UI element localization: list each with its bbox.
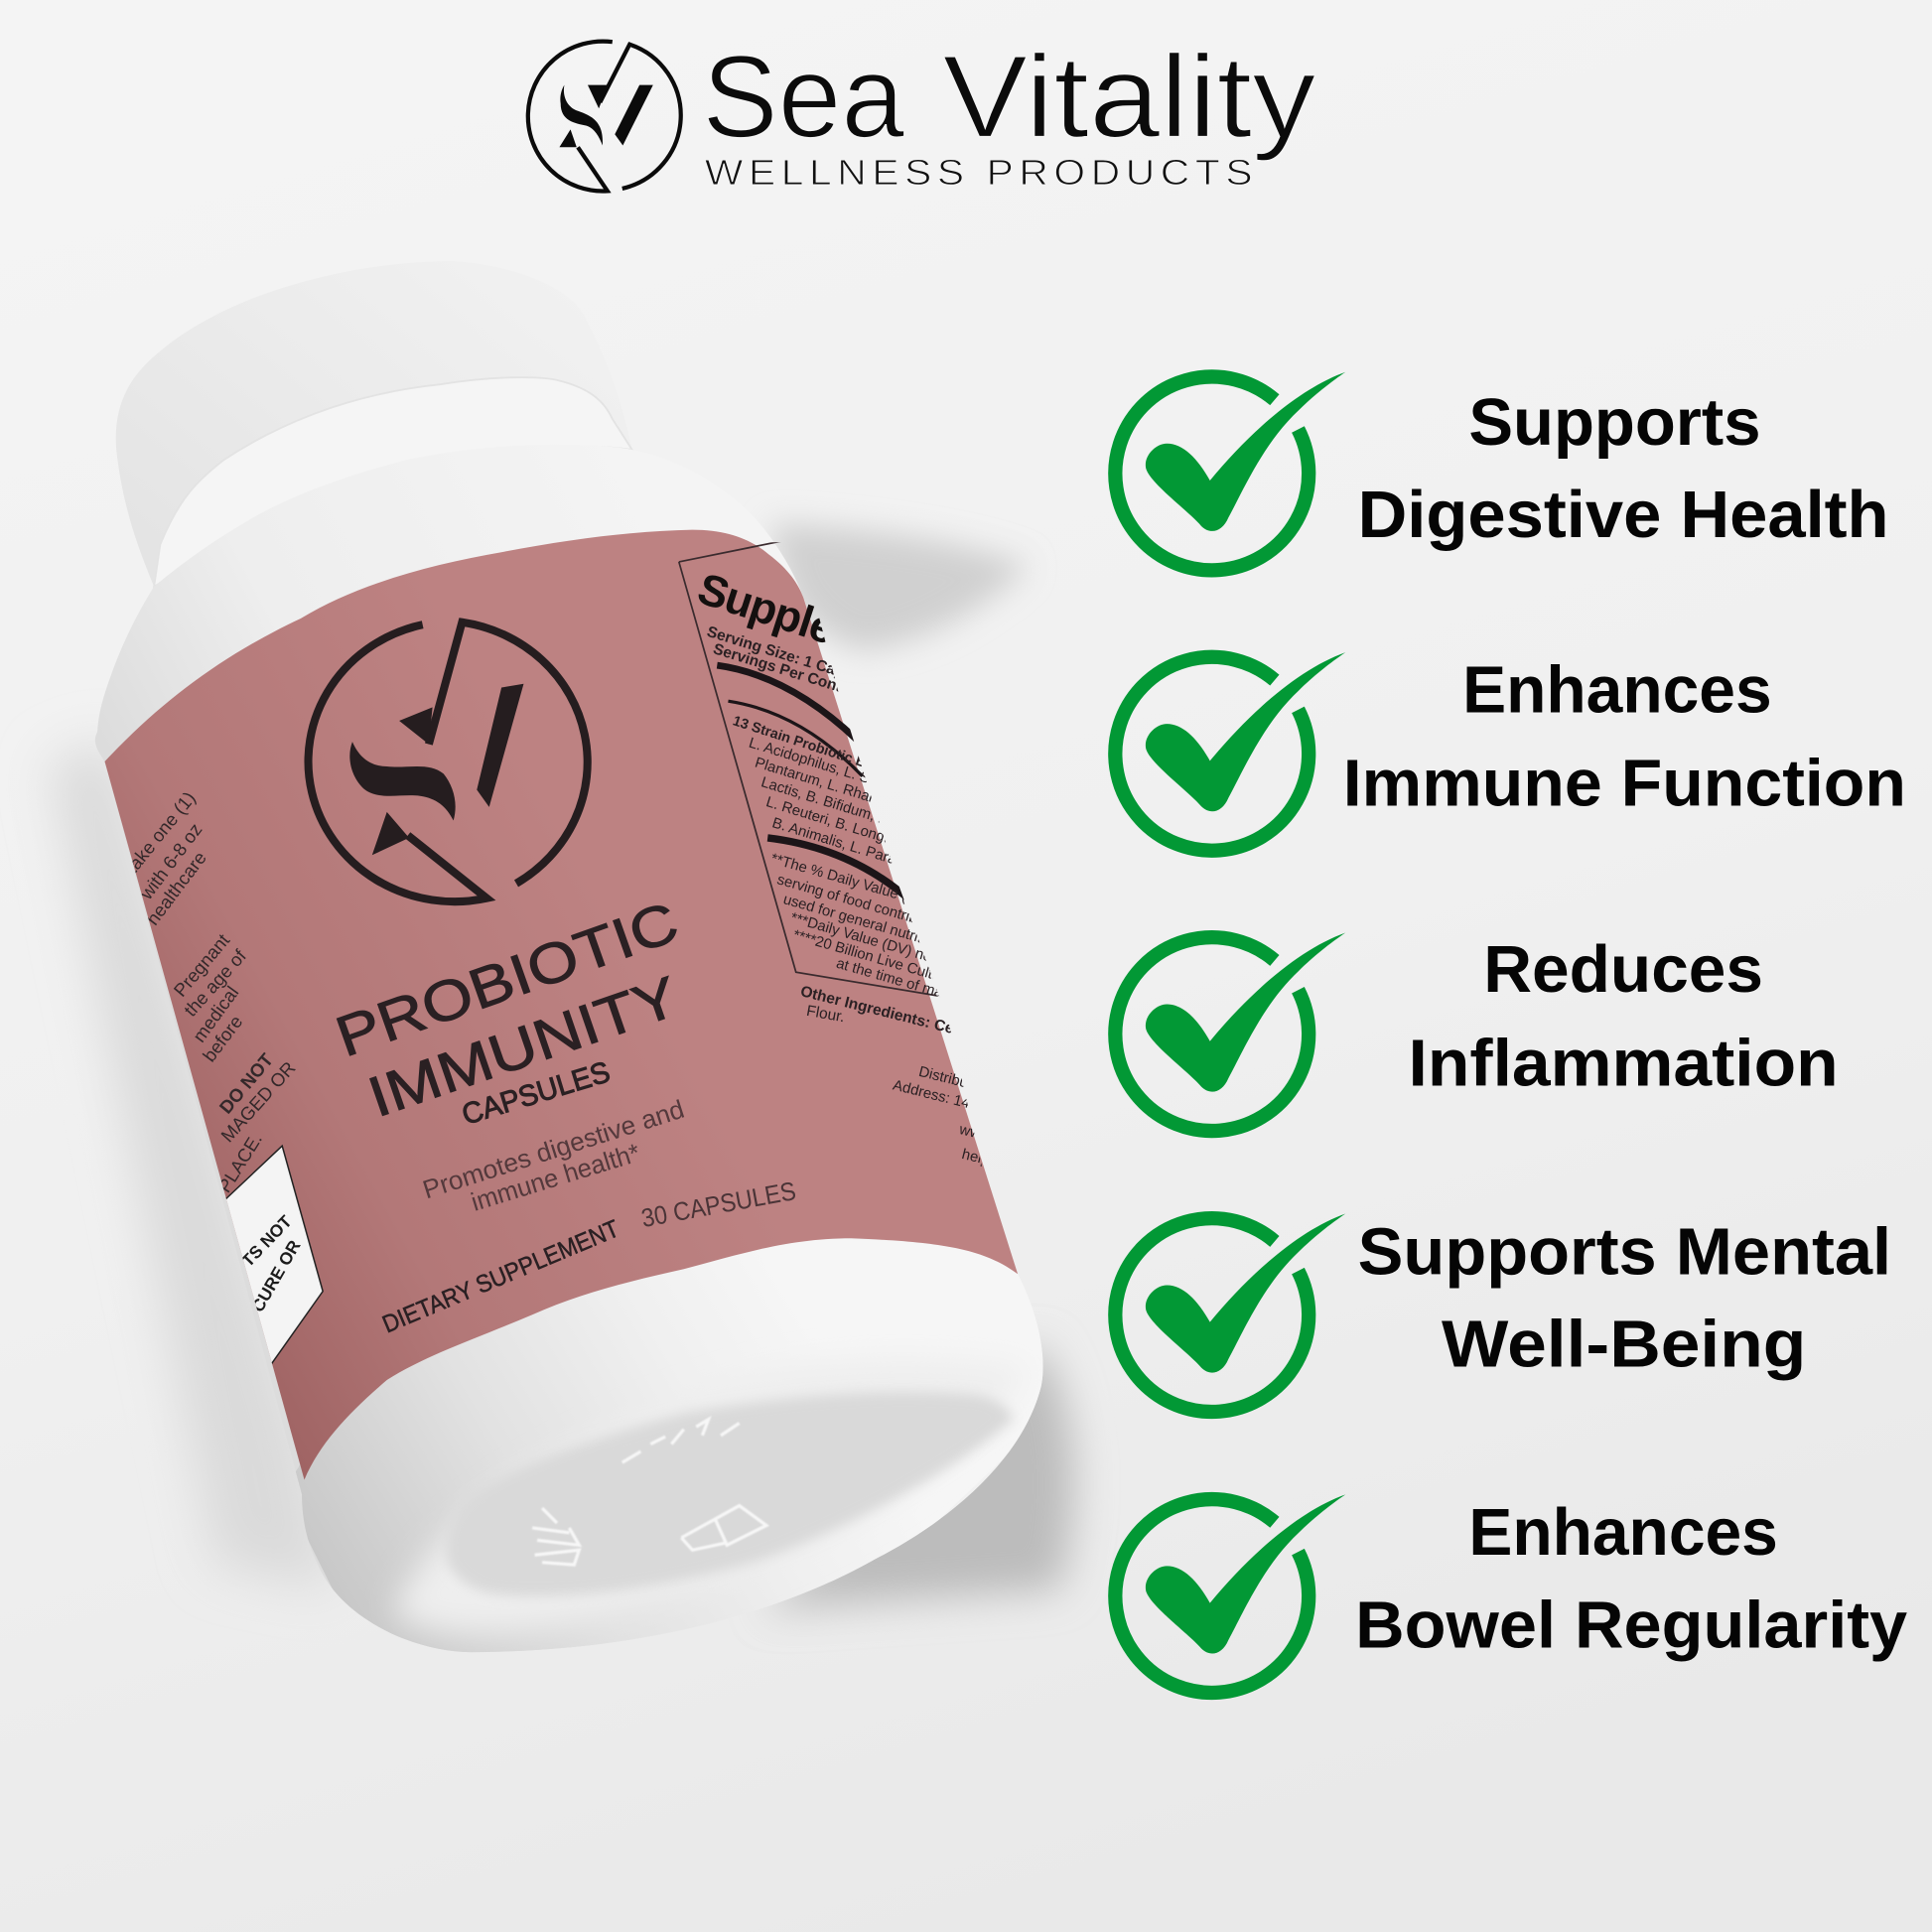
supplement facts panel: L. Acidophilus, L. Salivarius	[747, 736, 923, 803]
left side directions text: PLACE.	[213, 1129, 266, 1196]
white warning box: CURE OR	[247, 1236, 305, 1315]
supplement facts panel: Serving Size: 1 Capsule	[705, 623, 877, 690]
bottle cap	[116, 261, 632, 587]
left side directions text: before	[199, 1012, 246, 1065]
supplement facts panel: used for general nutrition	[781, 892, 943, 952]
supplement facts panel: Lactis, B. Bifidum, L. Casei	[759, 774, 932, 842]
benefit text: Enhances	[1468, 1495, 1778, 1570]
left side directions text: MAGED OR	[216, 1057, 300, 1146]
product bottle	[95, 261, 1059, 1663]
base recess	[446, 1392, 1014, 1596]
benefit text: Supports Mental	[1358, 1214, 1891, 1289]
benefit text	[1409, 932, 1839, 1100]
capsule count: 30 CAPSULES	[639, 1175, 798, 1233]
supplement facts panel: help@	[960, 1147, 1006, 1173]
brand name: Vitality	[942, 31, 1316, 162]
supplement facts panel: Supplement	[692, 565, 938, 686]
supplement facts panel: Other Ingredients: Cellulose	[798, 983, 1003, 1049]
left side directions text	[133, 792, 296, 1193]
benefit text: Enhances	[1462, 652, 1772, 727]
label logo	[309, 622, 588, 901]
cap collar	[154, 377, 632, 587]
left side directions text: Pregnant	[170, 929, 234, 1001]
supplement facts panel: Flour.	[805, 1003, 846, 1026]
benefit text: Bowel Regularity	[1355, 1587, 1907, 1662]
white warning box	[226, 1144, 324, 1364]
benefit 5	[1115, 1494, 1907, 1693]
product name	[328, 891, 686, 1132]
left side directions text: healthcare	[142, 848, 210, 929]
check icon	[1115, 932, 1345, 1131]
bottle cast shadows	[50, 523, 1074, 1609]
left side directions text: with 6-8 oz	[135, 819, 207, 903]
supplement facts panel: ****20 Billion Live Cultures	[791, 927, 962, 991]
product description: Promotes digestive and	[419, 1094, 688, 1204]
benefit text: Well-Being	[1442, 1307, 1806, 1381]
benefit 1	[1115, 372, 1889, 570]
base rim highlight	[392, 1536, 625, 1640]
supplement facts panel: **The % Daily Value (DV)	[769, 851, 933, 912]
brand name: Sea	[702, 31, 904, 162]
brand name	[702, 31, 1316, 162]
check icon	[1115, 652, 1345, 851]
dietary supplement line: DIETARY SUPPLEMENT	[379, 1215, 623, 1338]
supplement facts panel: 13 Strain Probiotic Blend	[731, 713, 896, 780]
brand tagline: WELLNESS PRODUCTS	[705, 152, 1258, 193]
benefit text: Reduces	[1483, 932, 1763, 1007]
benefit text: Supports	[1468, 385, 1760, 460]
benefit text	[1355, 1495, 1907, 1662]
supplement facts panel: B. Animalis, L. Paracasei	[770, 815, 931, 879]
check icon	[1115, 1213, 1345, 1412]
product description: immune health*	[468, 1137, 643, 1217]
benefit text: Inflammation	[1409, 1026, 1839, 1100]
check icon	[1115, 372, 1345, 570]
supplement facts panel: Plantarum, L. Rhamnosus	[753, 755, 921, 820]
left side directions text: medical	[189, 982, 242, 1046]
benefit 2	[1115, 652, 1906, 851]
logo mark	[528, 42, 681, 192]
benefit text	[1358, 1214, 1891, 1381]
white warning box: TS NOT	[237, 1211, 296, 1271]
benefit 4	[1115, 1213, 1891, 1412]
product name: CAPSULES	[459, 1055, 614, 1132]
brand logo	[528, 31, 1316, 193]
benefit 3	[1115, 932, 1839, 1131]
supplement facts panel: Servings Per Container: 30	[711, 640, 904, 715]
supplement facts panel: at the time of manufacture	[834, 956, 1004, 1019]
left side directions text: DO NOT	[215, 1048, 278, 1118]
supplement facts panel: serving of food contributes	[775, 872, 946, 935]
embossed marks	[532, 1420, 766, 1565]
supplement facts panel: ***Daily Value (DV) not	[788, 910, 938, 967]
bottle base	[296, 1372, 1042, 1652]
left side directions text: take one (1)	[121, 787, 200, 878]
supplement facts panel	[678, 542, 982, 1167]
pink label	[104, 530, 1018, 1480]
product name: IMMUNITY	[360, 965, 686, 1130]
benefit text: Immune Function	[1343, 747, 1906, 821]
check icon	[1115, 1494, 1345, 1693]
supplement facts panel: L. Reuteri, B. Longum	[764, 794, 906, 852]
left side directions text: the age of	[180, 945, 251, 1021]
benefit text	[1343, 652, 1906, 821]
supplement facts panel: Distributed by	[917, 1064, 1009, 1101]
benefit text: Digestive Health	[1358, 478, 1889, 552]
supplement facts panel: Address: 1400 Sea	[892, 1077, 1018, 1124]
benefit text	[1358, 385, 1889, 552]
bottle body	[95, 445, 1043, 1652]
product name: PROBIOTIC	[328, 891, 686, 1069]
supplement facts panel: www.sea	[957, 1122, 1020, 1152]
